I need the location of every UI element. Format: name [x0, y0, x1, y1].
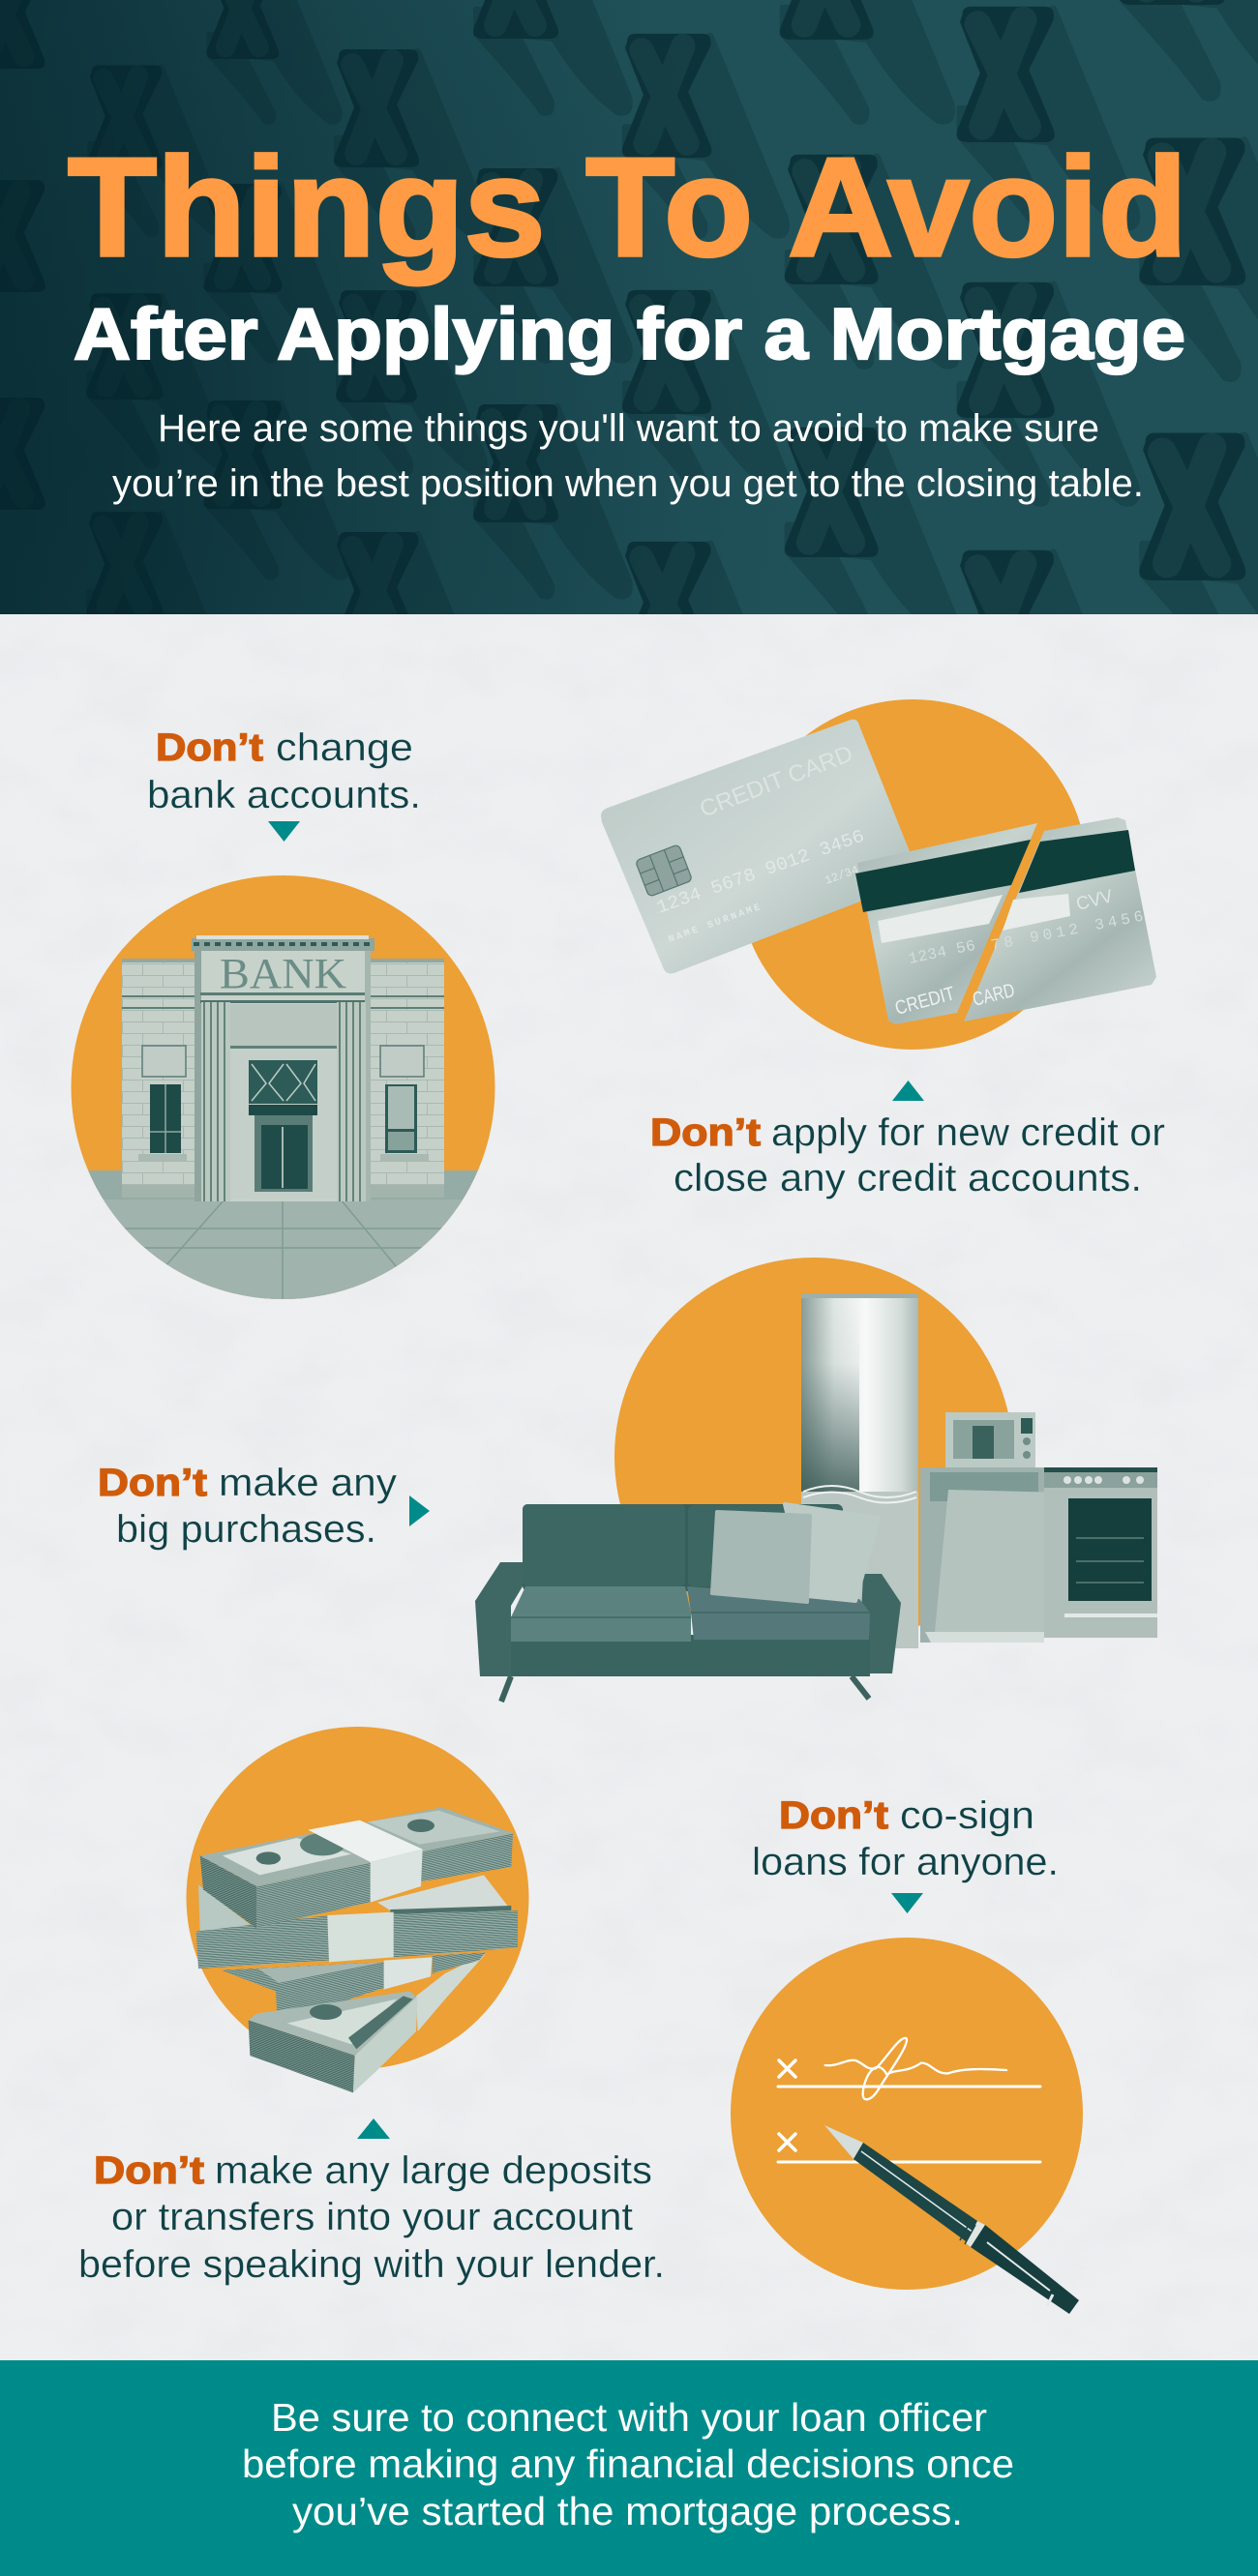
caption: credit: apply for new credit or — [771, 1111, 1165, 1154]
panel: don't co-sign loans — [731, 1794, 1083, 2314]
caption: bank accounts: bank accounts. — [147, 774, 421, 816]
caption: co-sign: loans for anyone. — [752, 1841, 1059, 1883]
footer text: you’ve started the mortgage process. — [292, 2489, 963, 2533]
caption: deposits — [78, 2149, 665, 2286]
caption: co-sign: Don’t — [779, 1794, 888, 1837]
icon: cut credit card back: CARD — [971, 980, 1017, 1011]
icon: cut credit card back: CREDIT — [893, 983, 957, 1020]
caption: co-sign — [752, 1794, 1059, 1883]
icon: cut credit card back: CVV — [1074, 886, 1115, 915]
icon: credit card front: 12/34 — [824, 863, 860, 888]
arrow down — [891, 1893, 923, 1913]
icon: cut credit card back: 78 9012 3456 — [990, 908, 1145, 955]
title: Things To Avoid — [68, 129, 1187, 285]
orange circle — [731, 1938, 1083, 2290]
caption: bank accounts: Don’t — [156, 726, 263, 769]
signature lines — [778, 2038, 1040, 2162]
intro text: you’re in the best position when you get to the closing table. — [112, 462, 1144, 505]
pillows — [785, 1504, 879, 1601]
caption: bank accounts: change — [276, 726, 413, 769]
icon: dishwasher — [920, 1467, 1066, 1643]
panel: don't change bank accounts — [68, 726, 498, 1306]
chip — [635, 844, 693, 897]
footer panel — [0, 2360, 1258, 2576]
intro text — [112, 407, 1144, 505]
header panel — [0, 0, 1258, 614]
caption: bank accounts — [147, 726, 421, 816]
caption: credit: Don’t — [650, 1111, 761, 1154]
panel: don't make big purchases — [98, 1258, 1157, 1702]
orange circle — [72, 875, 495, 1299]
icon: sofa — [475, 1504, 901, 1702]
paper texture — [0, 614, 1258, 2360]
orange circle — [737, 699, 1088, 1050]
arrow up — [357, 2118, 390, 2139]
caption: purchases: big purchases. — [116, 1508, 376, 1551]
arrow down — [268, 821, 300, 842]
footer text: before making any financial decisions once — [242, 2442, 1014, 2486]
icon: refrigerator — [801, 1293, 918, 1648]
sign: BANK: BANK — [220, 950, 346, 997]
caption: purchases: make any — [219, 1462, 397, 1504]
icon: bank building — [122, 935, 444, 1201]
orange circle — [186, 1727, 528, 2069]
icon: pen — [824, 2125, 1079, 2314]
icon: credit card front: 1234 5678 9012 3456 — [654, 825, 867, 919]
icon: credit card front — [601, 720, 920, 973]
footer text — [242, 2395, 1014, 2533]
subtitle: After Applying for a Mortgage — [74, 293, 1185, 374]
caption: purchases: Don’t — [98, 1462, 207, 1504]
footer text: Be sure to connect with your loan officer — [271, 2395, 987, 2440]
ground — [88, 1170, 478, 1299]
arrow right — [409, 1495, 430, 1526]
caption: deposits: or transfers into your account — [111, 2196, 633, 2238]
caption: co-sign: co-sign — [900, 1794, 1034, 1837]
icon: cut credit card back — [855, 817, 1156, 1024]
icon: credit card front: CREDIT CARD — [696, 741, 856, 823]
icon: oven — [1044, 1467, 1157, 1638]
icon: microwave — [945, 1412, 1035, 1467]
intro text: Here are some things you'll want to avoid to make sure — [158, 407, 1099, 450]
icon: cut credit card back: 1234 56 — [907, 937, 977, 968]
panel: don't apply for new credit — [601, 699, 1165, 1199]
caption: purchases — [98, 1462, 397, 1551]
caption: deposits: before speaking with your lender. — [78, 2243, 665, 2286]
orange circle — [614, 1258, 1013, 1656]
icon: stacks of money — [196, 1807, 518, 2092]
signature — [825, 2038, 1006, 2099]
caption: credit — [650, 1111, 1165, 1199]
caption: deposits: Don’t — [94, 2149, 204, 2192]
caption: deposits: make any large deposits — [215, 2149, 652, 2192]
caption: credit: close any credit accounts. — [674, 1157, 1142, 1199]
icon: credit card front: NAME SURNAME — [668, 903, 762, 946]
panel: don't make large deposits — [78, 1727, 665, 2286]
arrow up — [892, 1081, 924, 1101]
